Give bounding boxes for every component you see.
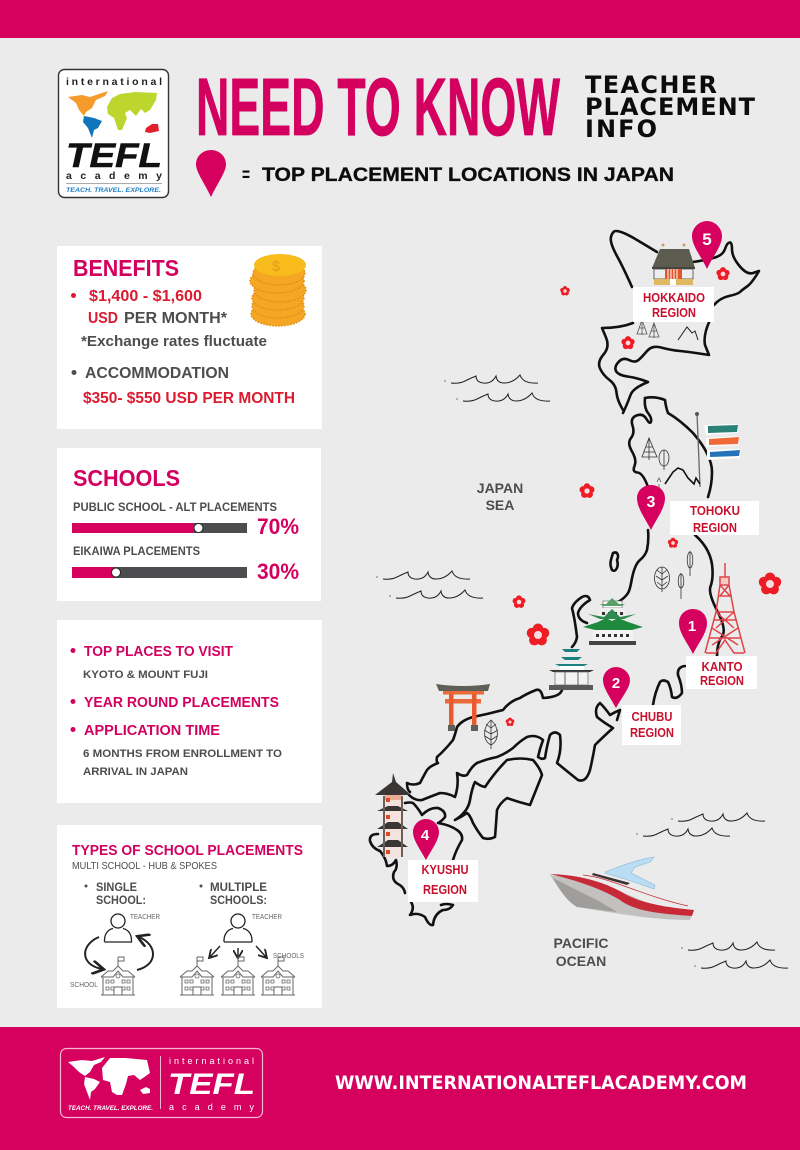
- item: application time: [70, 723, 282, 778]
- callout: kanto region: KANTO: [702, 659, 742, 674]
- bar: public school 70%: [72, 500, 299, 539]
- label: japan sea: JAPAN: [477, 480, 523, 496]
- callout: tohoku region: [670, 501, 759, 535]
- label: pacific ocean: [554, 935, 608, 969]
- bar: eikaiwa 30%: EIKAIWA PLACEMENTS: [73, 544, 200, 558]
- bar: public school 70%: PUBLIC SCHOOL - ALT PLACEMENTS: [73, 500, 277, 514]
- footer band: [0, 1027, 800, 1150]
- bullet: salary: USD: [88, 310, 118, 327]
- item: top places to visit: TOP PLACES TO VISIT: [84, 644, 233, 660]
- diagram: single school: SCHOOL: [70, 982, 98, 989]
- legend: pin equals top placement locations: TOP PLACEMENT LOCATIONS IN JAPAN: [262, 165, 674, 186]
- bar: eikaiwa 30%: [72, 544, 299, 584]
- kyushu coast: [370, 802, 462, 925]
- callout: kyushu region: KYUSHU: [422, 862, 468, 877]
- pin 4: kyushu: [413, 819, 439, 860]
- map: japan outline: [370, 231, 759, 925]
- callout: tohoku region: TOHOKU: [690, 503, 740, 518]
- item: year round placements: YEAR ROUND PLACEMENTS: [84, 695, 279, 711]
- heading: schools: SCHOOLS: [73, 465, 180, 491]
- item: top places to visit: KYOTO & MOUNT FUJI: [83, 669, 208, 681]
- subtitle: teacher placement info: TEACHER: [585, 71, 717, 99]
- pin 3: tohoku: 3: [647, 494, 656, 511]
- icon: torii gate: [436, 684, 490, 731]
- waves: sea decoration: [376, 375, 788, 968]
- icon: coin stack: $: [272, 258, 281, 275]
- callout: chubu region: CHUBU: [632, 709, 672, 724]
- hokkaido coast: [599, 231, 759, 413]
- logo: International TEFL Academy: TEACH. TRAVEL. EXPLORE.: [66, 187, 161, 194]
- pin 5: hokkaido: 5: [702, 230, 712, 249]
- legend: pin equals top placement locations: [196, 150, 674, 197]
- icon: boat: [550, 857, 694, 920]
- heading: types of school placements: TYPES OF SCHOOL PLACEMENTS: [72, 842, 303, 859]
- top banner: [0, 0, 800, 38]
- item: application time: ARRIVAL IN JAPAN: [83, 766, 188, 778]
- label: japan sea: SEA: [486, 497, 514, 513]
- subtitle: teacher placement info: PLACEMENT: [585, 93, 756, 121]
- footer logo: international: [169, 1056, 254, 1066]
- diagram: multiple schools: SCHOOLS: [273, 953, 304, 960]
- pin 2: chubu: 2: [612, 675, 620, 692]
- subtitle: teacher placement info: [585, 71, 756, 143]
- callout: hokkaido region: REGION: [652, 305, 696, 320]
- diagram: single school: TEACHER: [130, 914, 160, 921]
- callout: hokkaido region: HOKKAIDO: [643, 290, 705, 305]
- flowers: red blossoms: [506, 267, 781, 726]
- item: application time: APPLICATION TIME: [84, 723, 220, 739]
- icons: hokkaido trees and mountain: [637, 320, 698, 340]
- icon: white temple: [549, 649, 594, 690]
- icon: koinobori carp streamers: [695, 412, 740, 487]
- item: application time: 6 MONTHS FROM ENROLLMENT TO: [83, 748, 282, 760]
- logo: International TEFL Academy: academy: [66, 170, 162, 182]
- footer logo: TEACH. TRAVEL. EXPLORE.: [68, 1106, 153, 1112]
- diagram: single school: [70, 882, 160, 995]
- pin 2: chubu: [603, 667, 630, 708]
- bullet: accommodation: $350- $550 USD PER MONTH: [83, 390, 295, 407]
- pin 3: tohoku: [637, 485, 665, 530]
- subheading: hub and spokes: MULTI SCHOOL - HUB & SPOKES: [72, 861, 217, 872]
- pin 4: kyushu: 4: [421, 827, 430, 844]
- bullet: accommodation: ACCOMMODATION: [85, 365, 229, 382]
- bullet: accommodation: [72, 365, 295, 407]
- diagram: single school: SINGLE: [96, 882, 137, 894]
- panel: types of school placements: [57, 825, 322, 1008]
- callout: kanto region: REGION: [700, 673, 744, 688]
- item: top places to visit: [70, 644, 233, 681]
- bar: public school 70%: 70%: [257, 514, 299, 539]
- panel: benefits: [57, 246, 322, 429]
- diagram: multiple schools: MULTIPLE: [210, 882, 267, 894]
- pin 1: kanto: 1: [688, 618, 696, 635]
- bullet: salary: PER MONTH*: [124, 310, 228, 327]
- logo: International TEFL Academy: [58, 70, 168, 198]
- icons: central leaf and wheat: [654, 551, 693, 599]
- icon: hokkaido house: [652, 244, 695, 285]
- heading: benefits: BENEFITS: [73, 255, 179, 281]
- icon: coin stack: [250, 254, 306, 326]
- legend: pin equals top placement locations: =: [242, 165, 250, 186]
- bullet: salary: *Exchange rates fluctuate: [81, 333, 267, 350]
- callout: tohoku region: REGION: [693, 520, 737, 535]
- diagram: multiple schools: TEACHER: [252, 914, 282, 921]
- diagram: multiple schools: [180, 882, 304, 995]
- small island: [610, 553, 618, 571]
- icon: kyushu pagoda: [375, 773, 411, 857]
- icon: leaf: [484, 720, 498, 749]
- diagram: single school: SCHOOL:: [96, 895, 146, 907]
- callout: chubu region: REGION: [630, 725, 674, 740]
- icons: tohoku trees and mountain: [642, 438, 700, 488]
- logo: International TEFL Academy: TEFL: [66, 137, 162, 175]
- bullet: salary: $1,400 - $1,600: [89, 288, 202, 305]
- footer logo: academy: [169, 1102, 254, 1112]
- logo: International TEFL Academy: international: [66, 76, 162, 88]
- diagram: multiple schools: SCHOOLS:: [210, 895, 267, 907]
- callout: chubu region: [622, 705, 681, 745]
- callout: kyushu region: REGION: [423, 882, 467, 897]
- footer logo: TEFL: [168, 1068, 255, 1101]
- panel: schools: [57, 448, 321, 601]
- pin 1: kanto: [679, 609, 707, 654]
- footer url: WWW.INTERNATIONALTEFLACADEMY.COM: [335, 1072, 747, 1094]
- icon: green castle: [583, 598, 643, 645]
- callout: kyushu region: [408, 860, 478, 902]
- callout: hokkaido region: [633, 287, 714, 322]
- panel: places and timing: [57, 620, 322, 803]
- label: pacific ocean: PACIFIC: [554, 935, 608, 951]
- footer logo: [60, 1048, 262, 1118]
- label: pacific ocean: OCEAN: [556, 953, 606, 969]
- bar: eikaiwa 30%: 30%: [257, 559, 299, 584]
- shikoku coast: [455, 758, 542, 839]
- subtitle: teacher placement info: INFO: [585, 115, 657, 143]
- bullet: salary: [71, 288, 267, 350]
- icon: tokyo tower: [705, 563, 745, 653]
- callout: kanto region: [686, 656, 757, 689]
- pin 5: hokkaido: [692, 221, 722, 269]
- label: japan sea: [477, 480, 523, 513]
- honshu coast: [407, 397, 724, 800]
